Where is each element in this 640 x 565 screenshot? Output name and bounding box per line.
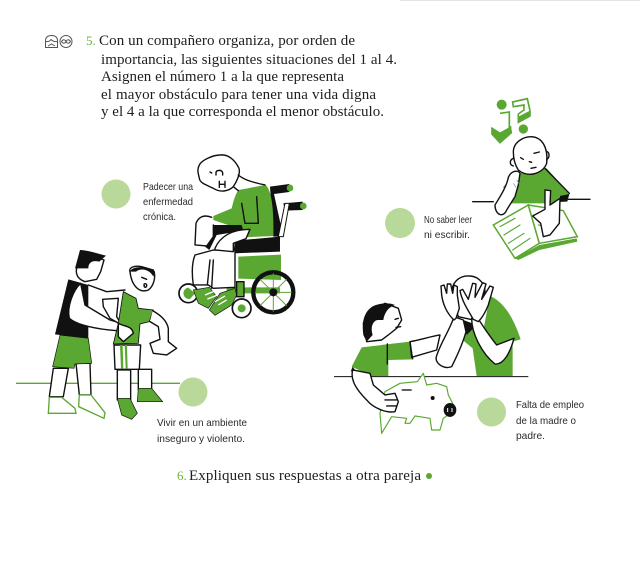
exercise 5 text: 5.: [86, 33, 96, 48]
marker circle: unemployment: [477, 398, 506, 426]
label: violence: [157, 417, 247, 445]
exercise 5 text: Asignen el número 1 a la que representa: [101, 69, 344, 85]
marker circle: violence: [178, 378, 208, 406]
exercise 6 text: 6.: [177, 468, 187, 483]
label: illiteracy: ni escribir.: [424, 229, 470, 241]
label: violence: inseguro y violento.: [157, 433, 245, 445]
marker circle: chronic illness: [102, 180, 130, 208]
exercise 5 text: [86, 33, 397, 120]
illustration: man in wheelchair: [179, 155, 307, 318]
illustration: boy reading: [473, 99, 590, 260]
icon: question marks: [492, 99, 530, 143]
label: unemployment: [516, 399, 584, 442]
exercise 5 text: Con un compañero organiza, por orden de: [99, 33, 355, 49]
label: illiteracy: [424, 214, 472, 241]
label: chronic illness: enfermedad: [143, 196, 193, 208]
icon: pair work faces: [46, 36, 72, 48]
exercise 5 text: importancia, las siguientes situaciones del 1 al 4.: [101, 52, 397, 68]
label: unemployment: Falta de empleo: [516, 399, 584, 411]
label: chronic illness: crónica.: [143, 211, 176, 223]
ground line: [16, 381, 180, 385]
label: unemployment: padre.: [516, 430, 545, 442]
exercise 5 text: el mayor obstáculo para tener una vida digna: [101, 87, 376, 103]
illustration: older boy grabbing younger boy: [16, 250, 180, 419]
label: chronic illness: Padecer una: [143, 181, 193, 193]
illustration: boy comforting parent with piggy bank: [334, 276, 528, 433]
exercise 5 text: y el 4 a la que corresponda el menor obstáculo.: [101, 104, 384, 120]
exercise 6 text: Expliquen sus respuestas a otra pareja: [189, 468, 421, 484]
label: violence: Vivir en un ambiente: [157, 417, 247, 429]
label: illiteracy: No saber leer: [424, 214, 472, 226]
marker circle: illiteracy: [385, 208, 415, 238]
label: unemployment: de la madre o: [516, 415, 576, 427]
label: chronic illness: [143, 181, 193, 223]
